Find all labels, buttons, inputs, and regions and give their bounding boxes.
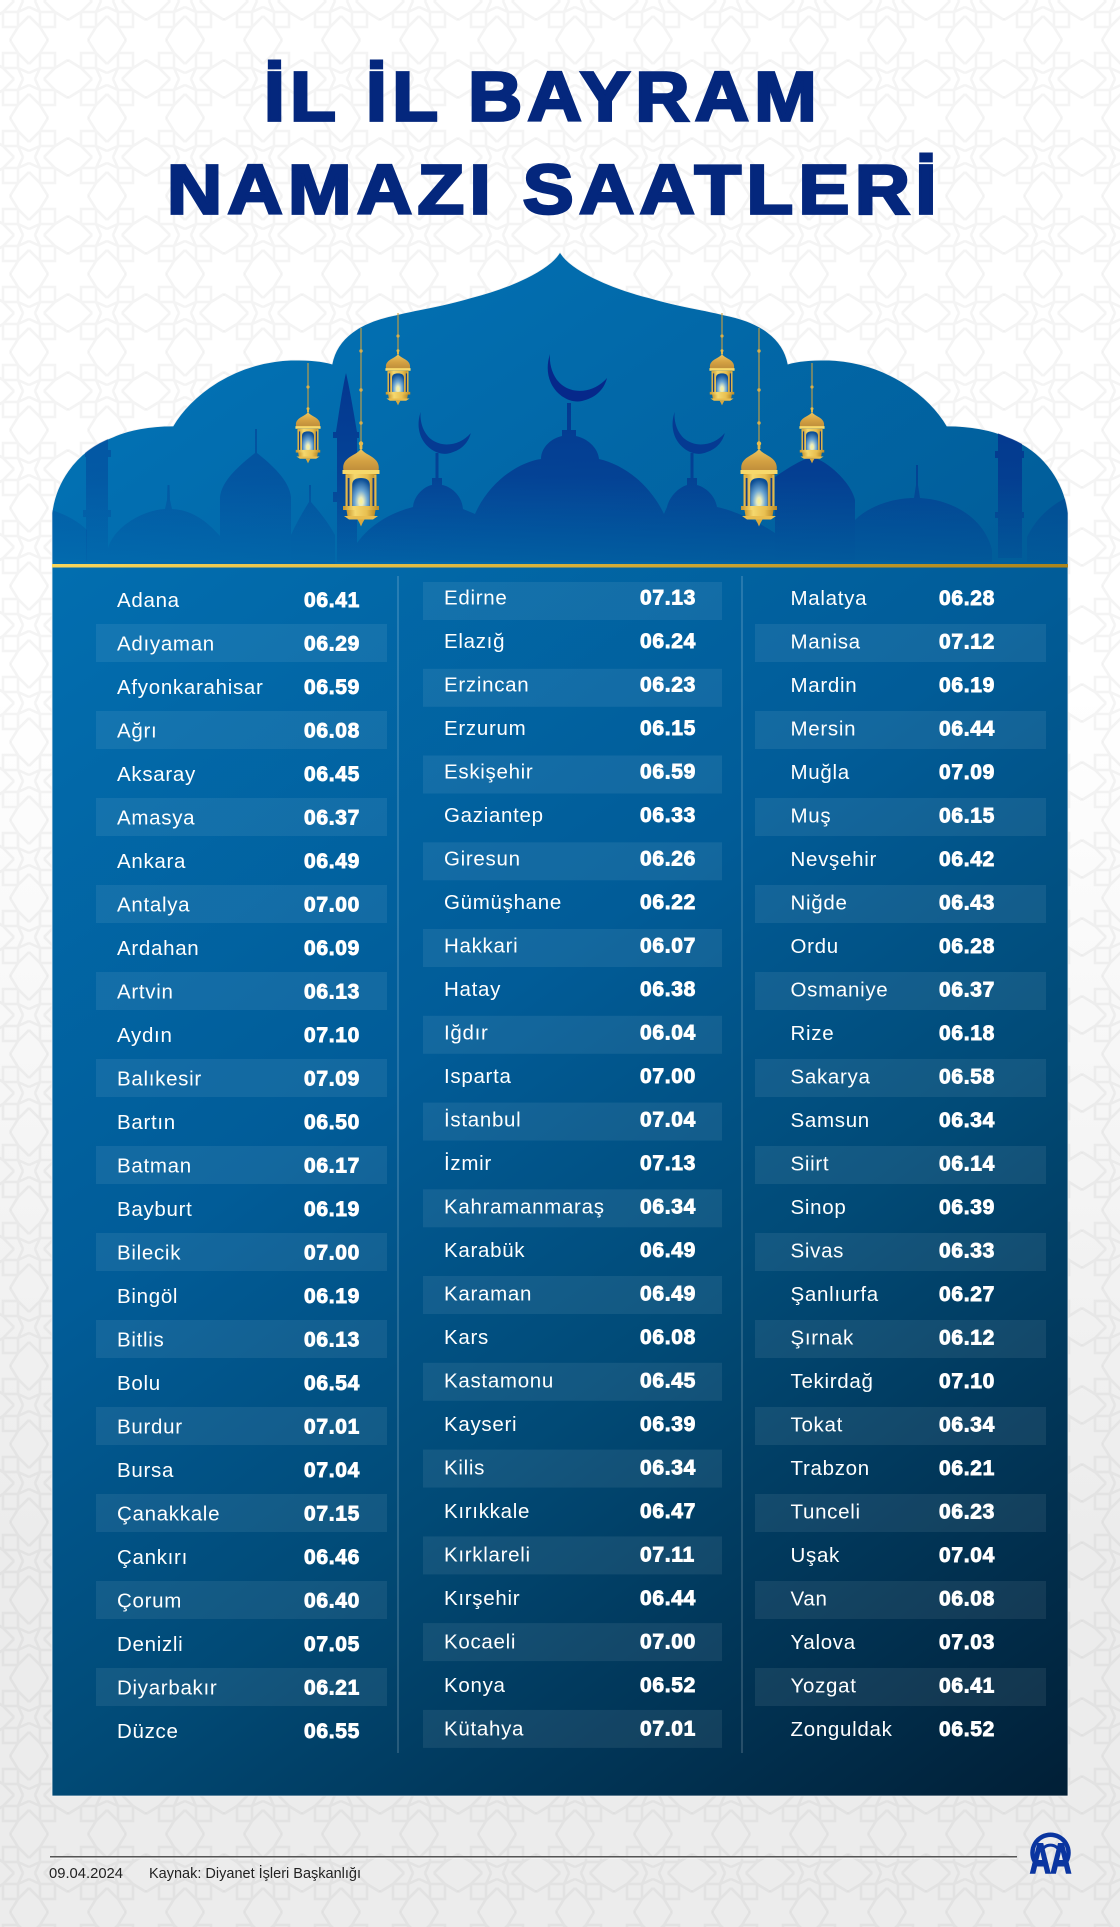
row: Sinop: Sinop [790,1196,846,1219]
row: Karaman [423,1276,722,1314]
row: Balıkesir [96,1059,387,1097]
panel: mosque-shaped background [52,252,1068,1796]
row: Malatya: Malatya [790,587,867,610]
row: Mardin: 06.19 [939,674,995,697]
row: Karaman: 06.49 [640,1282,696,1305]
row: Çankırı: 06.46 [304,1546,360,1569]
row: Kocaeli: Kocaeli [444,1630,516,1653]
row: Kırşehir: 06.44 [640,1587,696,1610]
row: Tekirdağ [790,1370,995,1393]
row: Rize [790,1022,995,1045]
row: Hatay: Hatay [444,978,501,1001]
row: Amasya: Amasya [117,806,195,830]
row: Bitlis [96,1320,387,1358]
row: Bilecik: 07.00 [304,1242,360,1264]
row: Aksaray [117,763,360,786]
row: Yozgat [755,1668,1046,1706]
row: Batman: Batman [117,1154,192,1178]
row: Sivas [755,1233,1046,1271]
row: Balıkesir: Balıkesir [117,1068,202,1090]
row: İstanbul: İstanbul [444,1108,521,1131]
row: Yozgat: 06.41 [939,1674,995,1698]
row: Bitlis: Bitlis [117,1328,164,1352]
row: Eskişehir: 06.59 [640,760,696,783]
row: Isparta: 07.00 [640,1065,696,1088]
row: Niğde [755,885,1046,923]
row: Ordu: 06.28 [939,935,995,958]
row: Hakkari: 06.07 [640,934,696,957]
row: Zonguldak: 06.52 [939,1718,995,1741]
row: Bilecik: Bilecik [117,1242,181,1264]
row: Denizli: Denizli [117,1633,183,1656]
row: Çanakkale [96,1494,387,1532]
column divider left [398,576,399,1753]
tall minaret [333,373,359,562]
row: Antalya [96,885,387,923]
row: Tokat: 06.34 [939,1414,995,1436]
row: Kahramanmaraş: Kahramanmaraş [444,1195,605,1218]
column 3: Malatya to Zonguldak [755,587,1046,1741]
row: Zonguldak: Zonguldak [790,1718,893,1741]
row: Nevşehir: Nevşehir [790,848,877,871]
row: Osmaniye: 06.37 [939,978,995,1002]
row: Tekirdağ: 07.10 [939,1370,995,1393]
row: Ağrı: 06.08 [304,720,360,742]
left low dome [111,485,220,542]
row: Şanlıurfa [790,1283,995,1306]
row: Burdur: 07.01 [304,1416,360,1438]
row: Kütahya: Kütahya [444,1717,524,1740]
icon: lantern inner right large [740,328,778,526]
row: Uşak: 07.04 [939,1544,995,1567]
row: Edirne: 07.13 [640,586,696,609]
icon: lantern outer left [295,363,321,463]
row: Karabük: Karabük [444,1239,525,1262]
row: Isparta: Isparta [444,1065,512,1088]
row: Bursa [117,1459,360,1482]
row: Hatay [444,978,696,1001]
row: Aksaray: 06.45 [304,763,360,786]
row: Ardahan: 06.09 [304,937,360,960]
row: Erzincan: Erzincan [444,673,529,696]
row: Aydın: 07.10 [304,1024,360,1047]
row: Uşak: Uşak [790,1544,840,1567]
row: Gaziantep: 06.33 [640,804,696,827]
row: Iğdır: Iğdır [444,1021,489,1044]
row: Çorum: 06.40 [304,1590,360,1612]
row: Kırşehir: Kırşehir [444,1587,520,1610]
row: Ağrı: Ağrı [117,720,157,742]
row: Zonguldak [790,1718,995,1741]
row: Erzurum: 06.15 [640,717,696,740]
row: İstanbul: 07.04 [640,1108,696,1131]
row: Sivas: 06.33 [939,1240,995,1262]
row: Siirt [755,1146,1046,1184]
row: Kırklareli: 07.11 [640,1543,695,1566]
row: Sakarya [755,1059,1046,1097]
row: Düzce [117,1720,360,1743]
row: Kırklareli [423,1536,722,1574]
row: Iğdır: 06.04 [640,1021,696,1044]
row: Denizli: 07.05 [304,1633,360,1656]
row: Kastamonu [423,1363,722,1401]
row: Denizli [117,1633,360,1656]
row: Aydın [117,1024,360,1047]
row: Bartın: Bartın [117,1111,176,1134]
row: Bingöl [117,1285,360,1308]
footer rule [50,1856,1017,1859]
row: Gümüşhane [444,891,696,914]
row: Tunceli [755,1494,1046,1532]
row: Manisa [755,624,1046,662]
row: Kırşehir [444,1587,696,1610]
row: Samsun [790,1109,995,1132]
right minaret [995,430,1024,558]
row: Isparta [444,1065,696,1088]
row: Elazığ: 06.24 [640,630,696,653]
row: Antalya: 07.00 [304,894,360,916]
row: Afyonkarahisar: 06.59 [304,676,360,699]
row: Hakkari [423,929,722,967]
row: Gümüşhane: 06.22 [640,891,696,914]
row: Ankara [117,850,360,873]
row: Erzincan: 06.23 [640,673,696,696]
row: Konya: Konya [444,1674,506,1697]
row: Kastamonu: Kastamonu [444,1369,554,1392]
row: Hatay: 06.38 [640,978,696,1001]
row: Kars: Kars [444,1326,489,1349]
row: Bartın [117,1111,360,1134]
row: Manisa: Manisa [790,630,861,654]
row: Bayburt: 06.19 [304,1198,360,1221]
left minaret [83,439,111,544]
row: Osmaniye [755,972,1046,1010]
row: Elazığ: Elazığ [444,630,505,653]
row: Çanakkale: 07.15 [304,1502,360,1526]
right low dome [855,465,992,562]
row: Gaziantep [444,804,696,827]
row: Tunceli: 06.23 [939,1500,995,1524]
row: Yozgat: Yozgat [790,1674,857,1698]
row: Osmaniye: Osmaniye [790,978,888,1002]
row: Bayburt: Bayburt [117,1198,193,1221]
row: Adıyaman: Adıyaman [117,632,215,656]
row: Kayseri: 06.39 [640,1413,696,1436]
row: Kilis: Kilis [444,1456,485,1479]
row: Sinop [790,1196,995,1219]
row: Samsun: 06.34 [939,1109,995,1132]
row: Düzce: Düzce [117,1720,179,1743]
row: Şırnak: 06.12 [939,1326,995,1350]
row: Karaman: Karaman [444,1282,532,1305]
row: Iğdır [423,1016,722,1054]
row: Kilis: 06.34 [640,1456,696,1479]
row: Artvin: Artvin [117,980,174,1004]
row: Çorum [96,1581,387,1619]
row: Aydın: Aydın [117,1024,173,1047]
row: Malatya [790,587,995,610]
row: Yalova: 07.03 [939,1631,995,1654]
row: Bitlis: 06.13 [304,1328,360,1352]
row: Trabzon [790,1457,995,1480]
row: Batman [96,1146,387,1184]
row: Samsun: Samsun [790,1109,870,1132]
row: Mersin: Mersin [790,718,856,740]
row: Ardahan [117,937,360,960]
row: Diyarbakır: 06.21 [304,1676,360,1700]
row: Giresun [423,842,722,880]
row: Burdur: Burdur [117,1416,183,1438]
row: Uşak [790,1544,995,1567]
row: Çankırı [117,1546,360,1569]
row: Artvin: 06.13 [304,980,360,1004]
column 1: Adana to Düzce [96,589,387,1743]
mosque silhouette [52,373,1068,565]
row: Mersin [755,711,1046,749]
row: Muğla: 07.09 [939,761,995,784]
row: Ardahan: Ardahan [117,937,199,960]
row: Bolu [117,1372,360,1395]
row: Bayburt [117,1198,360,1221]
row: Bolu: Bolu [117,1372,161,1395]
row: Hakkari: Hakkari [444,934,518,957]
row: Adana: Adana [117,589,180,612]
row: Sivas: Sivas [790,1240,844,1262]
row: Karabük [444,1239,696,1262]
row: Elazığ [444,630,696,653]
row: Van [755,1581,1046,1619]
row: Ordu [790,935,995,958]
icon: lantern inner left large [342,328,380,526]
column 2: Edirne to Kütahya [423,582,722,1748]
row: Muğla: Muğla [790,761,850,784]
row: Çanakkale: Çanakkale [117,1502,220,1526]
row: Bingöl: Bingöl [117,1285,178,1308]
row: Van: 06.08 [939,1588,995,1610]
far-left dome [52,510,87,562]
row: Kırıkkale: 06.47 [640,1500,696,1523]
icon: central crescent [548,354,607,402]
row: Eskişehir: Eskişehir [444,760,533,783]
row: Balıkesir: 07.09 [304,1068,360,1090]
row: Çorum: Çorum [117,1590,182,1612]
row: İzmir: İzmir [444,1152,492,1175]
row: Kastamonu: 06.45 [640,1369,696,1392]
icon: left crescent [419,412,471,454]
icon: lantern upper right [709,313,735,405]
row: Trabzon: Trabzon [790,1457,870,1480]
row: Manisa: 07.12 [939,630,995,654]
row: Tunceli: Tunceli [790,1500,861,1524]
row: Muş: Muş [790,804,831,828]
row: Mersin: 06.44 [939,718,995,740]
row: Kars [444,1326,696,1349]
row: Burdur [96,1407,387,1445]
icon: lantern upper left [385,313,411,405]
row: Şanlıurfa: Şanlıurfa [790,1283,879,1306]
row: Tokat: Tokat [790,1414,843,1436]
row: İzmir: 07.13 [640,1152,696,1175]
row: Afyonkarahisar [117,676,360,699]
column divider right [742,576,743,1753]
row: Yalova [790,1631,995,1654]
title: NAMAZI SAATLERİ [167,151,942,229]
row: Ağrı [96,711,387,749]
row: Giresun: 06.26 [640,847,696,870]
row: Erzurum [444,717,696,740]
row: Adıyaman: 06.29 [304,632,360,656]
central mosque [357,403,775,562]
row: Rize: 06.18 [939,1022,995,1045]
row: Diyarbakır [96,1668,387,1706]
row: Rize: Rize [790,1022,834,1045]
row: Adıyaman [96,624,387,662]
row: Amasya [96,798,387,836]
row: Niğde: 06.43 [939,892,995,914]
row: Kırklareli: Kırklareli [444,1543,531,1566]
title: İL İL BAYRAM [264,58,822,136]
row: Siirt: 06.14 [939,1152,995,1176]
small pointed dome [291,485,335,548]
row: Antalya: Antalya [117,894,190,916]
row: Tekirdağ: Tekirdağ [790,1370,874,1393]
row: Kayseri [444,1413,696,1436]
icon: AA logo: AA [1030,1834,1071,1882]
row: Bartın: 06.50 [304,1111,360,1134]
row: Kars: 06.08 [640,1326,696,1349]
row: Kütahya [423,1710,722,1748]
row: Kocaeli: 07.00 [640,1630,696,1653]
row: Ankara: Ankara [117,850,186,873]
row: Kocaeli [423,1623,722,1661]
row: Muğla [790,761,995,784]
row: Düzce: 06.55 [304,1720,360,1743]
row: Çankırı: Çankırı [117,1546,188,1569]
row: Kütahya: 07.01 [640,1717,696,1740]
row: Afyonkarahisar: Afyonkarahisar [117,676,264,699]
row: Konya: 06.52 [640,1674,696,1697]
row: Kırıkkale [444,1500,696,1523]
row: Kırıkkale: Kırıkkale [444,1500,530,1523]
row: Batman: 06.17 [304,1154,360,1178]
row: Eskişehir [423,756,722,794]
row: Diyarbakır: Diyarbakır [117,1676,217,1700]
row: Ordu: Ordu [790,935,839,958]
row: İzmir [444,1152,696,1175]
row: Malatya: 06.28 [939,587,995,610]
row: Mardin: Mardin [790,674,857,697]
row: Bingöl: 06.19 [304,1285,360,1308]
row: Bilecik [96,1233,387,1271]
row: Kilis [423,1450,722,1488]
row: Şırnak: Şırnak [790,1326,854,1350]
row: Muş [755,798,1046,836]
row: Siirt: Siirt [790,1152,829,1176]
row: Erzurum: Erzurum [444,717,526,740]
row: Bolu: 06.54 [304,1372,360,1395]
row: Konya [444,1674,696,1697]
left pointed dome [220,429,291,546]
right pointed dome [775,457,855,562]
row: Şırnak [755,1320,1046,1358]
row: Artvin [96,972,387,1010]
row: Gaziantep: Gaziantep [444,804,544,827]
gold divider line [52,564,1068,568]
row: Trabzon: 06.21 [939,1457,995,1480]
row: Sakarya: 06.58 [939,1066,995,1088]
row: Giresun: Giresun [444,847,521,870]
row: Şanlıurfa: 06.27 [939,1283,995,1306]
footer date: 09.04.2024 [49,1865,123,1882]
title [167,58,942,229]
row: Edirne [423,582,722,620]
row: Sinop: 06.39 [939,1196,995,1219]
row: Tokat [755,1407,1046,1445]
row: Erzincan [423,669,722,707]
row: Gümüşhane: Gümüşhane [444,891,562,914]
far-right dome [1027,497,1068,562]
row: Adana [117,589,360,612]
row: Amasya: 06.37 [304,806,360,830]
row: Van: Van [790,1588,828,1610]
row: Niğde: Niğde [790,892,848,914]
row: Adana: 06.41 [304,589,360,612]
row: Kayseri: Kayseri [444,1413,517,1436]
row: Bursa: Bursa [117,1459,174,1482]
icon: lantern outer right [799,363,825,463]
row: Edirne: Edirne [444,586,507,609]
row: Kahramanmaraş: 06.34 [640,1195,696,1218]
row: Bursa: 07.04 [304,1459,360,1482]
row: Aksaray: Aksaray [117,763,196,786]
row: Ankara: 06.49 [304,850,360,873]
row: Sakarya: Sakarya [790,1066,871,1088]
row: Muş: 06.15 [939,804,995,828]
row: Nevşehir: 06.42 [939,848,995,871]
row: Mardin [790,674,995,697]
row: Yalova: Yalova [790,1631,856,1654]
row: Nevşehir [790,848,995,871]
row: Karabük: 06.49 [640,1239,696,1262]
footer source: Kaynak: Diyanet İşleri Başkanlığı [149,1864,361,1882]
row: Kahramanmaraş [423,1189,722,1227]
icon: right crescent [673,412,725,454]
row: İstanbul [423,1103,722,1141]
